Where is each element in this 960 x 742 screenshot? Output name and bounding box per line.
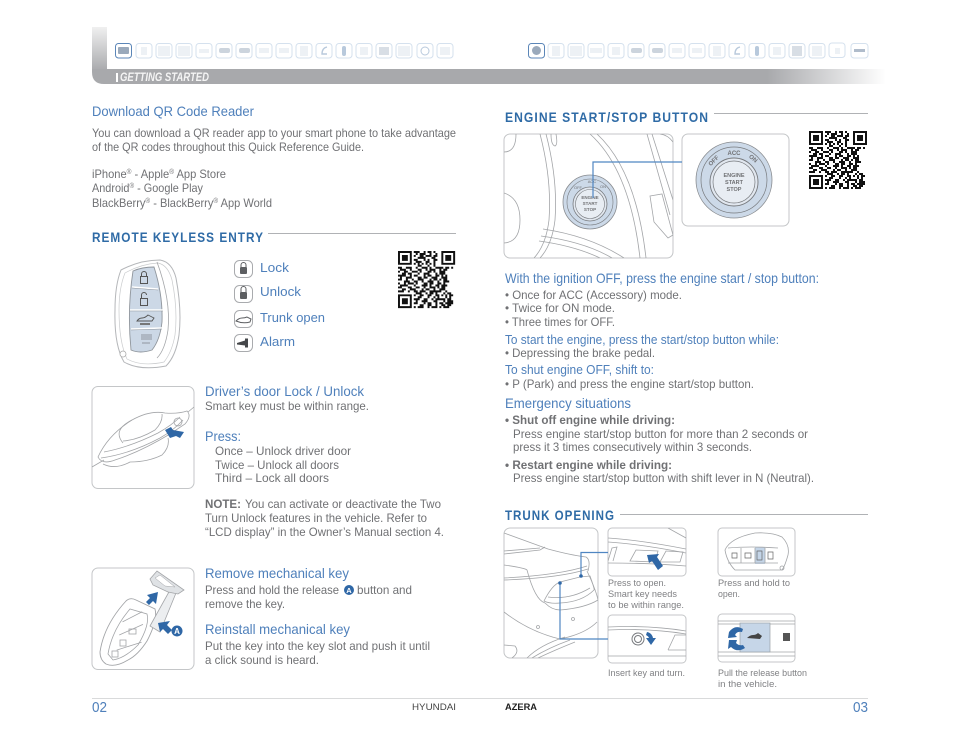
- text block: download QR code reader: - Apple: [131, 167, 170, 181]
- panel: engine start button enlarged: [682, 134, 789, 226]
- icon: blue arrow: [165, 427, 184, 438]
- text block: download QR code reader: ®: [169, 168, 175, 176]
- text block: driver's door lock and unlock: Twice – Unlock all doors: [215, 458, 339, 472]
- text block: driver's door lock and unlock: Driver’s door Lock / Unlock: [205, 383, 365, 399]
- footer: [92, 698, 868, 716]
- header band: [92, 27, 886, 84]
- text block: engine start instructions: With the ignition OFF, press the engine start / stop button:: [505, 270, 819, 286]
- panel: press to open: [608, 528, 686, 576]
- text block: download QR code reader: App Store: [174, 167, 226, 181]
- text block: engine start instructions: Press engine start/stop button with shift lever in N (Neutral).: [513, 471, 814, 485]
- text block: download QR code reader: Android: [92, 181, 133, 195]
- captions: trunk: Pull the release button: [718, 668, 807, 679]
- captions: trunk: open.: [718, 589, 740, 600]
- text block: download QR code reader: ®: [129, 182, 135, 190]
- text block: engine start instructions: • Three times for OFF.: [505, 315, 615, 329]
- captions: trunk: [608, 578, 807, 690]
- text block: mechanical key: A: [346, 586, 352, 595]
- engine start button small: OFF: [574, 185, 583, 190]
- label: alarm: Alarm: [260, 334, 295, 349]
- text block: download QR code reader: [92, 103, 456, 210]
- text block: engine start instructions: press it 3 times consecutively within 3 seconds.: [513, 440, 752, 454]
- text block: engine start instructions: • Twice for ON mode.: [505, 301, 615, 315]
- icon: alarm: [234, 334, 252, 352]
- note: [205, 497, 444, 539]
- panel: engine start button enlarged: ON: [747, 154, 758, 164]
- panel: engine start button enlarged: ACC: [728, 151, 741, 157]
- panel: door handle illustration: [92, 386, 194, 488]
- text block: download QR code reader: ®: [145, 197, 151, 205]
- icon: trunk: [234, 310, 252, 328]
- text block: driver's door lock and unlock: Smart key must be within range.: [205, 399, 369, 413]
- text block: download QR code reader: of the QR codes throughout this Quick Reference Guide.: [92, 140, 364, 154]
- icon: turn arrow: [646, 632, 656, 645]
- page number left: 02: [92, 699, 107, 716]
- heading: trunk opening: TRUNK OPENING: [505, 507, 615, 523]
- text block: mechanical key: Remove mechanical key: [205, 565, 349, 581]
- text block: engine start instructions: Press engine start/stop button for more than 2 seconds or: [513, 427, 808, 441]
- captions: trunk: Insert key and turn.: [608, 668, 685, 679]
- label: unlock: Unlock: [260, 284, 302, 299]
- panel: press and hold key: [718, 528, 795, 576]
- text block: engine start instructions: • Depressing the brake pedal.: [505, 346, 655, 360]
- text block: download QR code reader: You can download a QR reader app to your smart phone to take advantage: [92, 126, 456, 140]
- QR code: engine start: [809, 132, 866, 188]
- text block: mechanical key: button and: [357, 583, 412, 597]
- text block: engine start instructions: To start the engine, press the start/stop button while:: [505, 332, 779, 347]
- text block: mechanical key: Put the key into the key slot and push it until: [205, 639, 430, 653]
- note: You can activate or deactivate the Two: [245, 497, 441, 511]
- text block: download QR code reader: iPhone: [92, 167, 129, 181]
- text block: download QR code reader: App World: [218, 196, 272, 210]
- text block: mechanical key: Press and hold the release: [205, 583, 339, 597]
- panel: release button: [718, 614, 795, 662]
- text block: driver's door lock and unlock: Third – Lock all doors: [215, 471, 329, 485]
- icon: lock: [234, 260, 252, 278]
- text block: mechanical key: [205, 565, 430, 667]
- text block: engine start instructions: • Shut off engine while driving:: [505, 413, 675, 427]
- engine start button small: START: [583, 201, 598, 206]
- text block: engine start instructions: Emergency situations: [505, 395, 631, 411]
- panel: insert key: [608, 615, 686, 663]
- panel: mechanical key illustration: [92, 568, 194, 670]
- panel: steering wheel area: [504, 134, 673, 258]
- icon: blue arrow: [647, 554, 663, 570]
- note: “LCD display” in the Owner’s Manual section 4.: [205, 525, 444, 539]
- captions: trunk: Press to open.: [608, 578, 666, 589]
- icon: pull arrows: [728, 627, 745, 650]
- icon: blue arrow out: [146, 592, 158, 605]
- panel: engine start button enlarged: STOP: [727, 187, 742, 193]
- text block: engine start instructions: • Restart engine while driving:: [505, 458, 672, 472]
- text block: driver's door lock and unlock: Once – Unlock driver door: [215, 444, 351, 458]
- panel: rear of car: [504, 528, 598, 658]
- header title: GETTING STARTED: [120, 72, 209, 84]
- text block: download QR code reader: BlackBerry: [92, 196, 150, 210]
- heading: engine start stop button: ENGINE START/STOP BUTTON: [505, 109, 709, 125]
- panel: engine start button enlarged: START: [725, 180, 744, 186]
- text block: engine start instructions: To shut engine OFF, shift to:: [505, 362, 654, 377]
- heading: remote keyless entry: REMOTE KEYLESS ENTRY: [92, 229, 264, 245]
- text block: mechanical key: Reinstall mechanical key: [205, 621, 350, 637]
- icon strip: left page tabs: [116, 44, 453, 58]
- text block: engine start instructions: • Once for ACC (Accessory) mode.: [505, 288, 682, 302]
- label: trunk open: Trunk open: [260, 310, 325, 325]
- note: Turn Unlock features in the vehicle. Refer to: [205, 511, 427, 525]
- text block: mechanical key: remove the key.: [205, 597, 285, 611]
- engine start button small: ON: [600, 184, 606, 189]
- engine start button small: STOP: [584, 207, 596, 212]
- engine start button small: ACC: [588, 179, 596, 184]
- captions: trunk: Smart key needs: [608, 589, 677, 600]
- captions: trunk: to be within range.: [608, 600, 684, 611]
- callout line: engine button: [593, 162, 682, 198]
- panel: engine start button enlarged: ENGINE: [723, 173, 745, 179]
- text block: driver's door lock and unlock: [205, 383, 369, 485]
- text block: download QR code reader: ®: [127, 168, 132, 176]
- callout lines: trunk: [558, 552, 608, 639]
- captions: trunk: Press and hold to: [718, 578, 790, 589]
- page number right: 03: [853, 699, 868, 716]
- engine start button small: ENGINE: [581, 195, 599, 200]
- text block: download QR code reader: ®: [213, 197, 219, 205]
- text block: download QR code reader: - BlackBerry: [150, 196, 213, 210]
- text block: driver's door lock and unlock: Press:: [205, 428, 241, 444]
- note: NOTE:: [205, 497, 241, 511]
- brand: HYUNDAI: [412, 702, 456, 713]
- icon: unlock: [234, 286, 252, 302]
- text block: download QR code reader: - Google Play: [134, 181, 203, 195]
- icon strip: right page tabs: [528, 43, 868, 58]
- button legend: [234, 260, 325, 352]
- engine start button small: [563, 175, 617, 229]
- illustration: smart key fob: [115, 260, 180, 368]
- QR code: remote keyless entry: [398, 252, 454, 307]
- panel: engine start button enlarged: OFF: [708, 155, 721, 168]
- model: AZERA: [505, 702, 537, 713]
- icon: blue arrow press: [158, 621, 172, 634]
- text block: download QR code reader: Download QR Code Reader: [92, 103, 254, 119]
- text block: mechanical key: a click sound is heard.: [205, 653, 319, 667]
- badge: A: A: [174, 627, 180, 636]
- captions: trunk: in the vehicle.: [718, 679, 777, 690]
- text block: engine start instructions: • P (Park) and press the engine start/stop button.: [505, 377, 754, 391]
- text block: engine start instructions: [505, 270, 819, 485]
- label: lock: Lock: [260, 260, 290, 275]
